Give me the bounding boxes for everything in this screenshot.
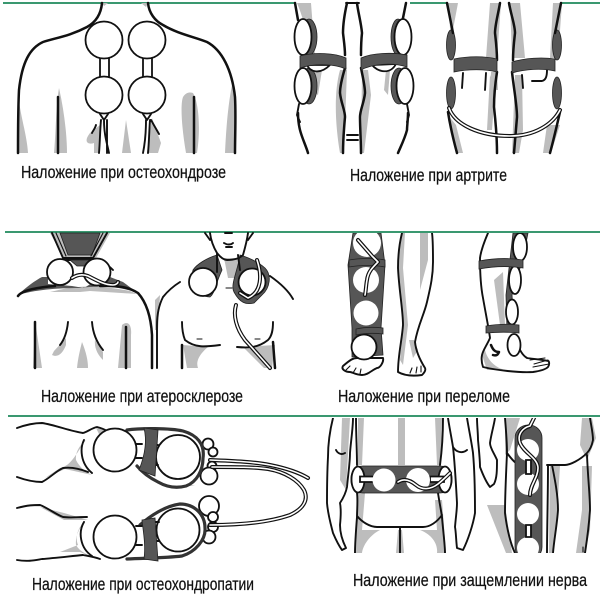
illustration: torso and leg with belts <box>327 418 596 560</box>
panel: atherosclerosis <box>18 233 293 406</box>
panel: osteochondrosis <box>18 3 236 182</box>
sole outline: bottom foot <box>127 504 205 559</box>
caption: atherosclerosis: Наложение при атеросклерозе <box>41 386 243 406</box>
illustration: back with four pads <box>18 3 236 153</box>
panel: pinched nerve <box>327 418 596 590</box>
panel: fracture <box>338 229 549 406</box>
caption: osteochondrosis: Наложение при остеохондрозе <box>21 162 226 182</box>
toes: top foot <box>200 438 218 484</box>
caption: arthritis: Наложение при артрите <box>350 165 507 185</box>
toes: bottom foot <box>199 496 219 544</box>
caption: fracture: Наложение при переломе <box>338 386 510 406</box>
panel: arthritis <box>294 3 562 185</box>
illustration: legs with wrap <box>342 229 549 376</box>
illustration: feet with pads and tube <box>17 423 308 561</box>
caption: osteochondropathy: Наложение при остеохондропатии <box>32 574 254 594</box>
illustration: knees with pads and strap <box>294 3 562 153</box>
illustration: shoulders back and front <box>18 233 293 368</box>
panel: osteochondropathy <box>17 423 308 594</box>
sole outline: top foot <box>127 429 203 487</box>
